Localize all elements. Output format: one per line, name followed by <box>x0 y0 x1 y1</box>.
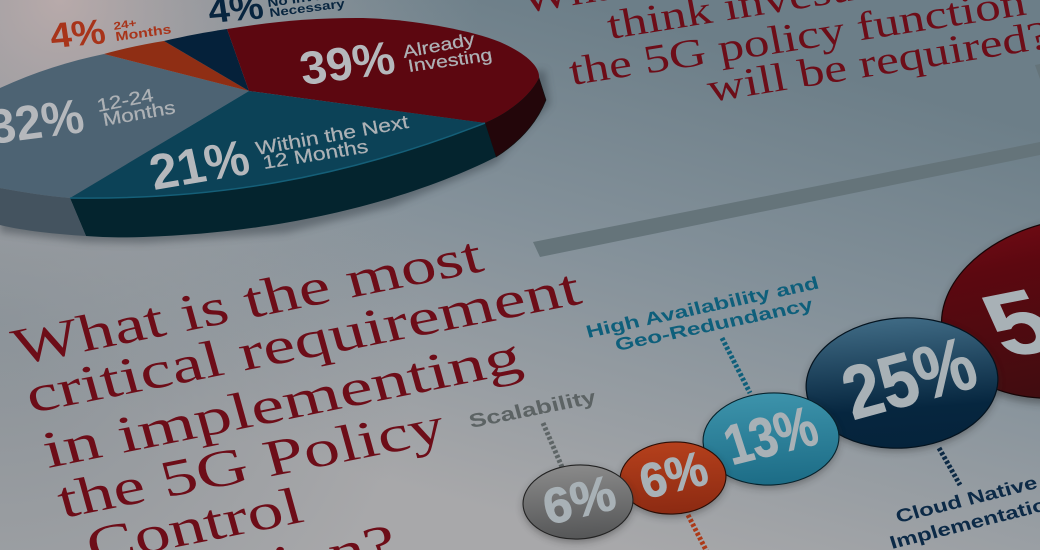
bubble: 6% orange <box>618 439 728 520</box>
question title lower left: the 5G Policy <box>50 396 452 529</box>
bubble: 25% <box>802 311 1002 458</box>
bubble: 25%: 25% <box>833 322 986 436</box>
label 21% within next 12 months: Within the Next <box>254 112 410 159</box>
label 4% no investment necessary <box>205 0 372 31</box>
label 32% 12-24 months: Months <box>101 98 177 130</box>
pie slice side: slate <box>0 188 86 236</box>
pie slice: teal 21% <box>70 91 485 198</box>
bubble: 6% orange: 6% <box>634 442 713 510</box>
bubble: 13% <box>701 390 841 491</box>
bubble: 6% gray: 6% <box>537 464 621 536</box>
pie slice: slate 32% <box>0 54 249 198</box>
label 4% 24+ months <box>47 12 172 56</box>
label: Scalability: Scalability <box>466 386 598 432</box>
label 21% within next 12 months: 12 Months <box>261 136 370 173</box>
pie slice: navy 4% <box>164 29 249 91</box>
bubble: 13%: 13% <box>716 394 825 476</box>
label 4% 24+ months: 4% <box>47 12 108 56</box>
label 32% 12-24 months <box>0 85 177 155</box>
bubble chart <box>521 195 1040 545</box>
label 32% 12-24 months: 12-24 <box>95 85 155 116</box>
label 39% already investing: 39% <box>296 31 399 95</box>
label 39% already investing <box>296 29 494 95</box>
label: Cloud Native Implementation: Cloud Native <box>893 473 1040 527</box>
label: High Availability and Geo-Redundancy: High Availability and <box>584 273 821 342</box>
bubble: 50% <box>924 195 1040 427</box>
label 4% 24+ months: Months <box>115 23 172 45</box>
divider bar <box>533 64 1040 257</box>
pie chart: investment timing <box>0 18 550 243</box>
question title lower left: What is the most <box>6 227 489 376</box>
label 21% within next 12 months: 21% <box>144 129 254 201</box>
label 39% already investing: Investing <box>406 45 494 76</box>
label 4% 24+ months: 24+ <box>113 17 137 33</box>
label 21% within next 12 months <box>144 112 410 201</box>
label 39% already investing: Already <box>401 29 476 62</box>
question title lower left: critical requirement <box>19 258 587 424</box>
pie slice side: teal <box>70 123 496 237</box>
question title lower left <box>6 227 587 550</box>
teal rim highlight <box>70 123 485 198</box>
bubble: 6% gray <box>521 462 635 545</box>
connector dotted lines <box>543 338 960 550</box>
pie slice: orange 4% <box>104 41 249 91</box>
label: High Availability and Geo-Redundancy: Geo-Redundancy <box>613 294 815 355</box>
question title lower left: in implementing <box>36 326 528 479</box>
pie slice: red 39% <box>227 18 539 123</box>
pie slice side: red <box>485 78 546 157</box>
